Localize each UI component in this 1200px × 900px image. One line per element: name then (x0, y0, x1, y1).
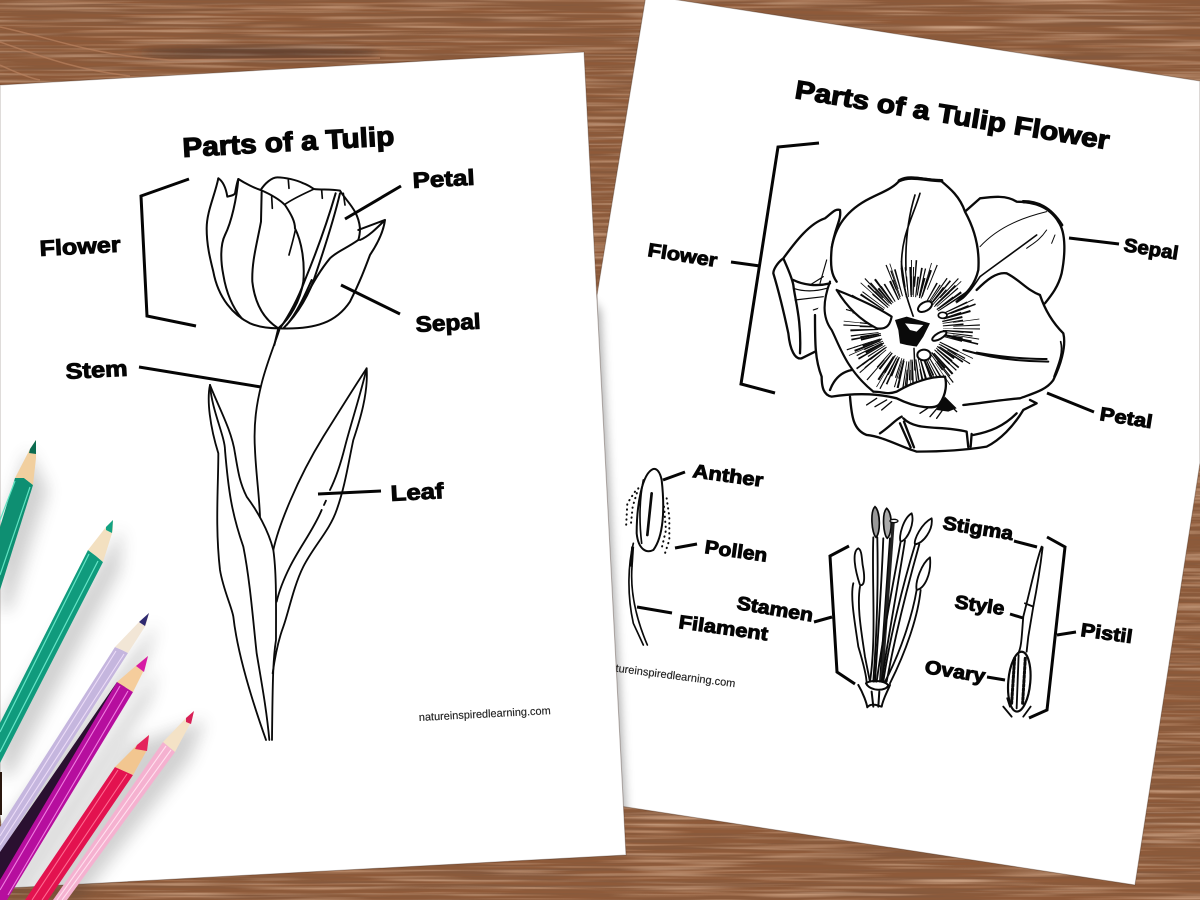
label: Ovary: Ovary (923, 657, 987, 688)
label: Petal (1047, 393, 1154, 433)
left paper sheet (0, 52, 626, 888)
label: Sepal (1069, 235, 1180, 265)
label: Stem: Stem (65, 356, 128, 384)
label: Petal (345, 165, 475, 219)
label: Sepal (341, 285, 481, 337)
dark gap shadow between pencils (0, 682, 126, 880)
label: Leaf (318, 478, 445, 506)
flower bracket (141, 179, 196, 326)
label: Flower: Flower (39, 232, 122, 261)
stamen bracket and label: Stamen (735, 593, 815, 627)
label: Stigma (941, 513, 1037, 547)
label: Pollen (675, 537, 769, 567)
left website credit: natureinspiredlearning.com (419, 705, 551, 724)
gap of wood beside left sheet corner (0, 772, 2, 815)
pencil: lilac (0, 613, 149, 853)
left worksheet: Parts of a Tulip (0, 52, 626, 888)
diagram: pistil with stigma, style and ovary (1003, 547, 1043, 717)
label: Leaf: Leaf (390, 478, 445, 506)
pistil bracket and label: Pistil (1079, 620, 1134, 648)
pencil shadows (0, 450, 205, 900)
label: Filament: Filament (677, 612, 770, 646)
diagram: single stamen with anther, pollen and filament (626, 469, 669, 645)
label: Filament (637, 607, 770, 646)
pencil: pink (53, 711, 194, 900)
label: Pollen: Pollen (703, 537, 769, 567)
right worksheet: Parts of a Tulip Flower (560, 0, 1200, 885)
pencil: magenta (0, 656, 148, 900)
label: Sepal: Sepal (415, 309, 481, 337)
label: Style (953, 592, 1023, 620)
flower bracket and leader (731, 143, 819, 393)
label: Style: Style (953, 592, 1006, 620)
label: Anther (663, 461, 765, 492)
label: Petal: Petal (1098, 404, 1154, 433)
shadow cast by left sheet on right sheet (598, 300, 632, 808)
left title: Parts of a Tulip (182, 121, 395, 163)
diagram: group of stamens (852, 507, 932, 707)
label: Ovary (923, 657, 1005, 688)
right website credit: natureinspiredlearning.com (603, 661, 736, 690)
illustration: tulip flower head (207, 177, 385, 345)
illustration: tulip stem and leaves (209, 330, 367, 740)
pistil bracket and label (1029, 537, 1134, 718)
label: Petal: Petal (412, 165, 475, 193)
label: Stem (65, 356, 261, 387)
label: Stigma: Stigma (941, 513, 1015, 545)
right title: Parts of a Tulip Flower (793, 74, 1112, 155)
stamen bracket and label (735, 546, 855, 684)
pencil: red (25, 735, 149, 900)
coloured pencils (0, 440, 205, 900)
illustration: open tulip flower (773, 177, 1064, 452)
right paper sheet (597, 0, 1200, 885)
label: Anther: Anther (691, 461, 765, 492)
label: Flower: Flower (646, 240, 719, 272)
pencil: teal green (0, 520, 113, 763)
pencil: dark green (0, 440, 36, 590)
label: Sepal: Sepal (1122, 235, 1180, 265)
